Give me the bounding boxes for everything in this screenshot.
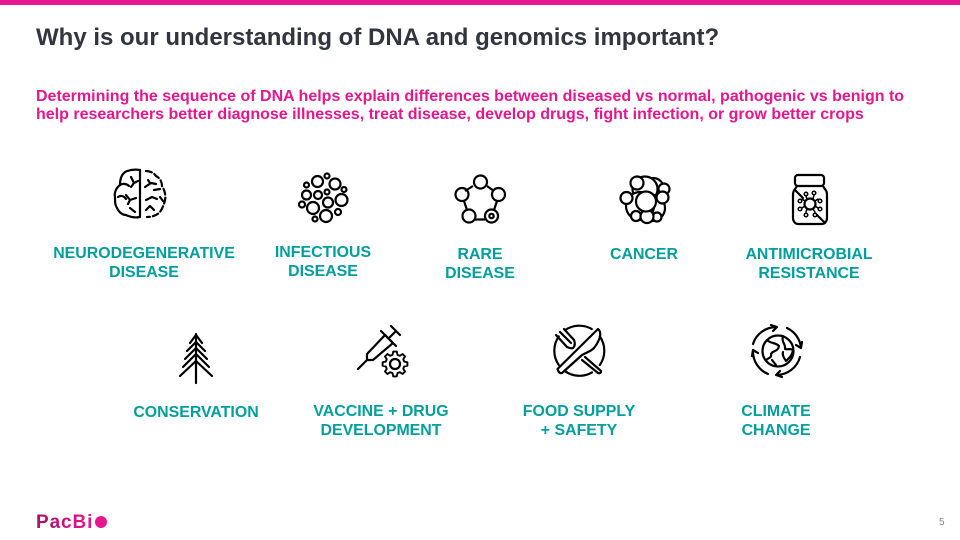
label: food supply and safety: + SAFETY xyxy=(541,422,617,439)
label: climate change: CHANGE xyxy=(742,422,810,439)
label: neurodegenerative disease: DISEASE xyxy=(109,264,179,281)
top accent bar xyxy=(0,0,960,5)
label: food supply and safety: FOOD SUPPLY xyxy=(523,403,635,420)
intro text: help researchers better diagnose illnesses, treat disease, develop drugs, fight infection, or grow better crops xyxy=(36,106,864,123)
label: climate change xyxy=(741,403,811,439)
label: rare disease xyxy=(445,246,515,282)
label: infectious disease xyxy=(275,244,371,280)
intro text: Determining the sequence of DNA helps explain differences between diseased vs normal, pathogenic vs benign to xyxy=(36,88,904,105)
title: Why is our understanding of DNA and genomics important? xyxy=(36,24,719,51)
label: antimicrobial resistance: ANTIMICROBIAL xyxy=(745,246,873,263)
label: rare disease: DISEASE xyxy=(445,265,515,282)
label: vaccine and drug development xyxy=(313,403,449,439)
label: rare disease: RARE xyxy=(457,246,503,263)
label: antimicrobial resistance: RESISTANCE xyxy=(758,265,860,282)
label: conservation: CONSERVATION xyxy=(133,404,259,421)
label: food supply and safety xyxy=(523,403,635,439)
label: neurodegenerative disease xyxy=(53,245,235,281)
label: infectious disease: DISEASE xyxy=(288,263,358,280)
label: neurodegenerative disease: NEURODEGENERATIVE xyxy=(53,245,235,262)
label: infectious disease: INFECTIOUS xyxy=(275,244,371,261)
page number: 5 xyxy=(939,517,945,528)
label: vaccine and drug development: DEVELOPMENT xyxy=(321,422,441,439)
label: vaccine and drug development: VACCINE + DRUG xyxy=(313,403,449,420)
logo: PacBio: PacBi xyxy=(36,512,93,533)
intro text xyxy=(36,88,904,123)
label: cancer: CANCER xyxy=(610,246,678,263)
label: climate change: CLIMATE xyxy=(741,403,811,420)
label: antimicrobial resistance xyxy=(745,246,873,282)
